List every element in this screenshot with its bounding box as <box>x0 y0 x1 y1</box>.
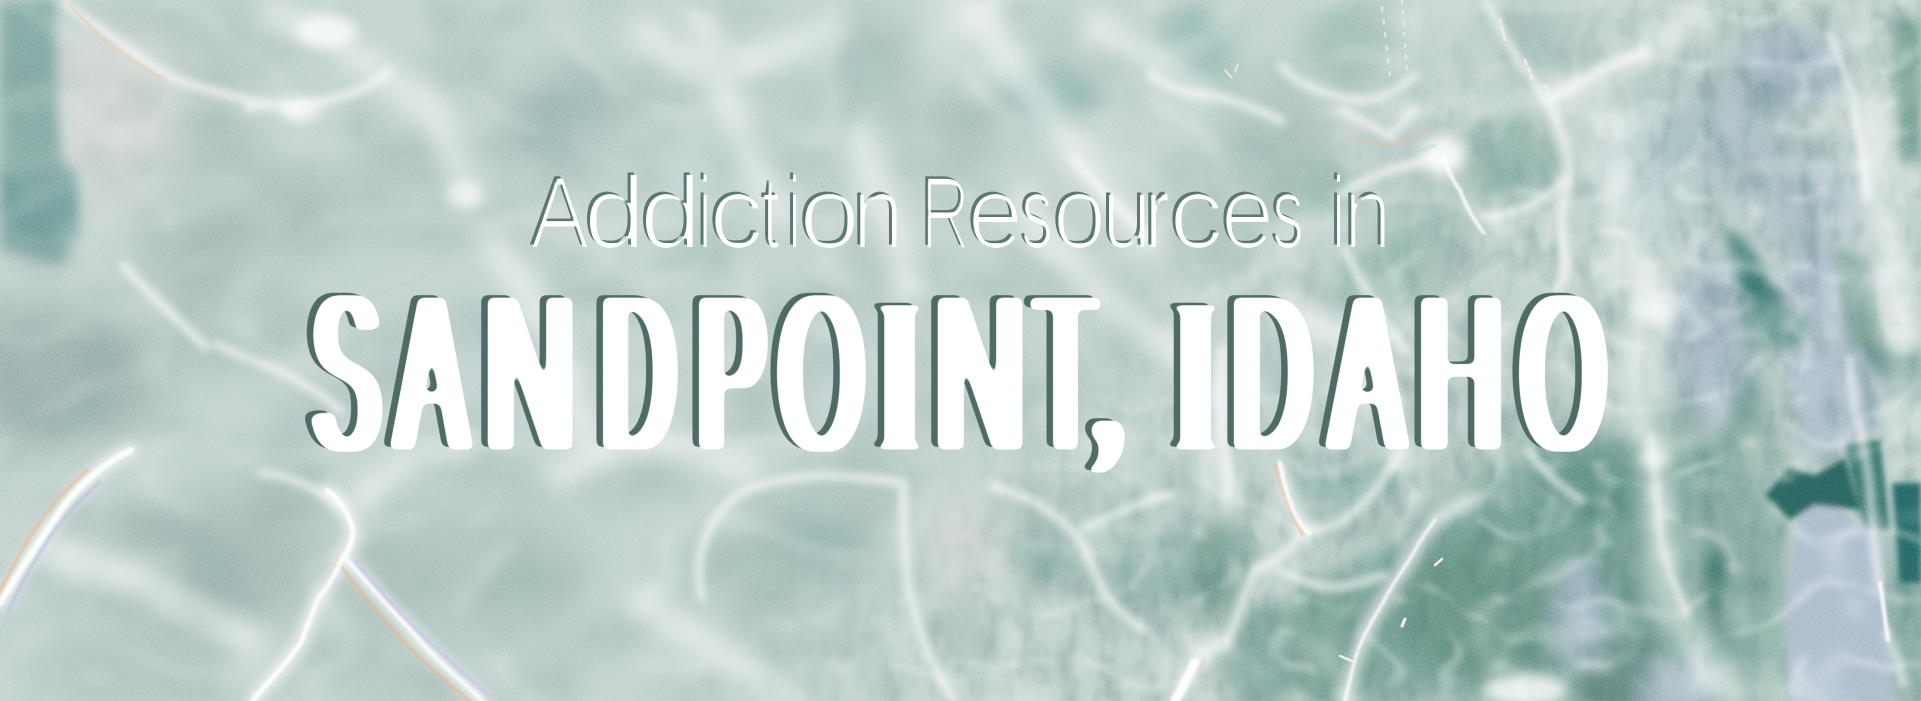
subtitle: Addiction Resources in <box>530 156 1392 270</box>
subtitle: Addiction Resources in: i <box>694 156 716 270</box>
heading: SANDPOINT, IDAHO: A <box>396 247 467 501</box>
subtitle: Addiction Resources in: o <box>799 156 860 270</box>
subtitle: Addiction Resources in: c <box>709 156 764 270</box>
sharp bright lines <box>0 157 1888 701</box>
glow around bright lines <box>0 450 1472 701</box>
subtitle: Addiction Resources in: s <box>1021 156 1053 270</box>
subtitle: Addiction Resources in: d <box>639 156 702 270</box>
heading: SANDPOINT, IDAHO: N <box>936 247 1024 501</box>
subtitle: Addiction Resources in: c <box>1169 156 1224 270</box>
fine ripple detail at right <box>818 0 1921 701</box>
subtitle: Addiction Resources in: A <box>530 156 590 270</box>
heading: SANDPOINT, IDAHO: I <box>881 250 918 502</box>
rainbow fringes on bright lines <box>0 5 1436 701</box>
subtitle: Addiction Resources in: n <box>1343 156 1392 270</box>
heading: SANDPOINT, IDAHO: , <box>1095 278 1121 488</box>
heading: SANDPOINT, IDAHO: D <box>1233 247 1311 501</box>
subtitle: Addiction Resources in: s <box>1272 156 1304 270</box>
subtitle: Addiction Resources in: R <box>921 156 971 270</box>
heading: SANDPOINT, IDAHO: D <box>603 247 675 501</box>
subtitle: Addiction Resources in: u <box>1101 156 1153 270</box>
heading: SANDPOINT, IDAHO: S <box>314 247 379 501</box>
specks and dotted highlights <box>1225 0 1549 661</box>
subtitle: Addiction Resources in: e <box>967 156 1024 270</box>
subtitle: Addiction Resources in: t <box>762 156 780 270</box>
subtitle: Addiction Resources in: r <box>1145 156 1170 270</box>
subtitle: Addiction Resources in: i <box>783 156 806 270</box>
subtitle: Addiction Resources in: o <box>1052 156 1107 270</box>
heading: SANDPOINT, IDAHO: I <box>1177 250 1214 502</box>
banner: O <box>1522 247 1605 501</box>
subtitle: Addiction Resources in: d <box>583 156 646 270</box>
heading: SANDPOINT, IDAHO: O <box>780 247 863 501</box>
heading: SANDPOINT, IDAHO: N <box>486 247 574 501</box>
subtitle: Addiction Resources in: e <box>1220 156 1275 270</box>
subtitle: Addiction Resources in: n <box>852 156 905 270</box>
heading: SANDPOINT, IDAHO <box>314 247 1605 502</box>
heading: SANDPOINT, IDAHO: H <box>1420 247 1502 501</box>
fine caustic network at right <box>816 0 1921 701</box>
heading: SANDPOINT, IDAHO: T <box>1036 247 1095 501</box>
subtitle: Addiction Resources in: i <box>1327 156 1350 270</box>
heading: SANDPOINT, IDAHO: P <box>699 247 765 501</box>
caustic light patches <box>280 16 1677 701</box>
heading: SANDPOINT, IDAHO: A <box>1331 247 1404 501</box>
